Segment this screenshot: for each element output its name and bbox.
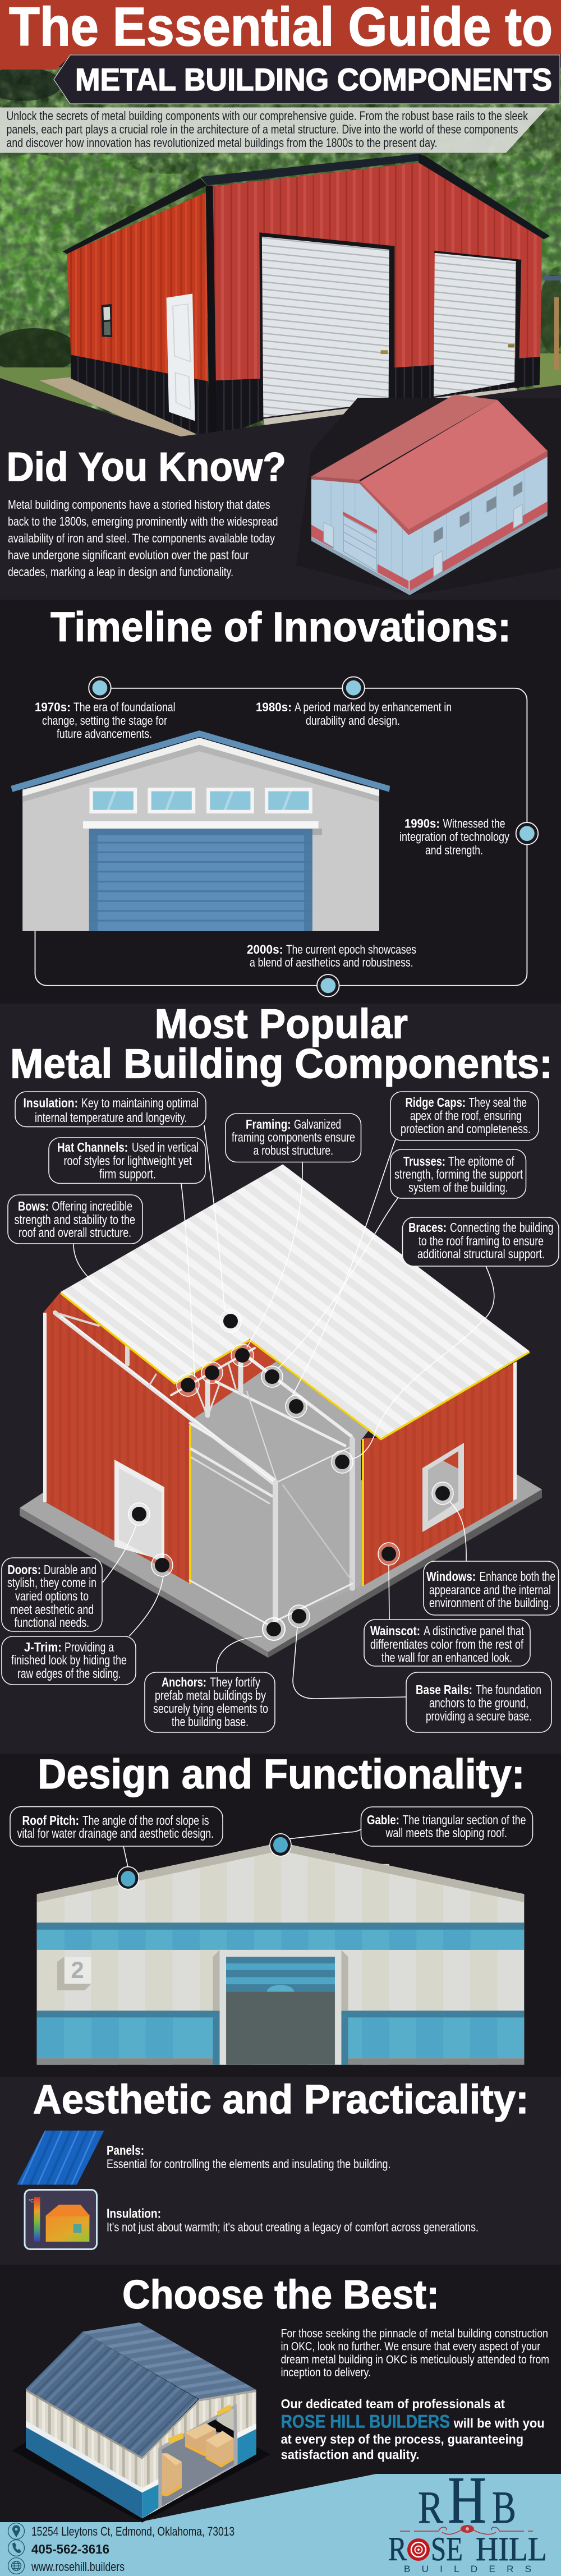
heading: Most Popular Metal Building Components — [10, 1001, 553, 1087]
right red wall — [363, 1361, 517, 1586]
callout: Trusses: Trusses: — [403, 1154, 445, 1169]
illustration: warehouse with pallets — [12, 2322, 270, 2523]
panel: choose the best — [0, 2265, 561, 2576]
callout: Doors: Durable and — [44, 1562, 96, 1577]
text: team statement: at every step of the process, guaranteeing — [281, 2432, 523, 2446]
building photo: red metal garage — [63, 154, 550, 440]
icon: blue metal panel — [17, 2131, 104, 2184]
callout: Bows — [8, 1195, 142, 1244]
timeline text: 2000s — [247, 942, 416, 969]
contact details — [8, 2523, 234, 2574]
callout: Trusses: The epitome of — [448, 1154, 514, 1169]
callout markers — [128, 1310, 453, 1640]
callout: Ridge Caps: apex of the roof, ensuring — [410, 1108, 522, 1123]
panel: aesthetic and practicality — [0, 2077, 561, 2265]
icon: thermal insulation house — [25, 2190, 96, 2250]
text: Insulation: Insulation: — [107, 2206, 161, 2221]
callout: Anchors: securely tying elements to — [153, 1701, 268, 1715]
callout: Ridge Caps: Ridge Caps: — [405, 1095, 466, 1110]
logo: Rose Hill Builders: B — [492, 2482, 516, 2533]
callout: Windows — [424, 1561, 559, 1615]
callout: Framing: Framing: — [246, 1117, 291, 1131]
heading: Most Popular Metal Building Components: Most Popular — [155, 1001, 408, 1047]
callout leader lines — [73, 1125, 494, 1699]
left red wall — [43, 1292, 195, 1584]
callout: Bows: strength and stability to the — [15, 1212, 135, 1227]
callout: Doors: functional needs. — [15, 1615, 89, 1630]
callout: Anchors: the building base. — [172, 1714, 249, 1729]
callout: Insulation: Insulation: — [24, 1096, 78, 1110]
text: address: 15254 Lleytons Ct, Edmond, Oklahoma, 73013 — [31, 2524, 234, 2538]
callout: J-Trim — [2, 1636, 136, 1685]
callout: Hat Channels: roof styles for lightweight yet — [64, 1153, 192, 1168]
callout: Wainscot: differentiates color from the rest of — [370, 1637, 523, 1652]
logo: Rose Hill Builders: BUILDERS — [404, 2564, 531, 2574]
panel: most popular components — [0, 1001, 561, 1754]
text: Insulation — [107, 2206, 479, 2234]
text: Panels — [107, 2143, 390, 2171]
callout: Hat Channels: firm support. — [99, 1167, 156, 1181]
history text: back to the 1800s, emerging prominently with the widespread — [8, 514, 278, 528]
leader: roof pitch — [123, 1846, 128, 1867]
callout: Doors: Doors: — [7, 1562, 41, 1577]
leader: gable — [290, 1829, 361, 1839]
text: team statement — [281, 2396, 545, 2462]
intro text — [7, 109, 528, 150]
timeline text: 1970s: The era of foundational — [73, 700, 175, 714]
timeline text: 2000s: The current epoch showcases — [286, 942, 416, 956]
callout: Hat Channels: Used in vertical — [132, 1140, 199, 1154]
callout: Bows: Offering incredible — [52, 1199, 132, 1213]
timeline text: 1980s — [256, 700, 452, 728]
callout: Framing: Galvanized — [294, 1117, 341, 1131]
logo: Rose Hill Builders: H — [448, 2463, 486, 2537]
text: phone: 405-562-3616 — [31, 2542, 109, 2556]
callout: Doors: varied options to — [15, 1589, 89, 1603]
text: team statement: will be with you — [453, 2416, 545, 2430]
callout: Anchors: Anchors: — [162, 1675, 206, 1690]
panel: did you know — [7, 394, 561, 595]
callout: J-Trim: J-Trim: — [24, 1640, 62, 1654]
timeline text: 1970s: 1970s: — [35, 700, 71, 714]
icon: globe — [8, 2558, 25, 2574]
illustration: gable warehouse front — [37, 1843, 524, 2065]
text: Panels: Essential for controlling the elements and insulating the building. — [107, 2157, 390, 2171]
text: team statement: Our dedicated team of professionals at — [281, 2396, 505, 2411]
timeline text: 1990s — [399, 817, 509, 857]
timeline text: 1970s — [35, 700, 175, 740]
callout: Framing: a robust structure. — [254, 1143, 333, 1158]
door on left wall — [114, 1460, 164, 1562]
heading: Aesthetic and Practicality: Aesthetic and Practicality: — [33, 2077, 529, 2122]
callout: Framing: framing components ensure — [232, 1130, 355, 1144]
building number sign: 2 — [71, 1957, 84, 1983]
callout: Hat Channels: Hat Channels: — [57, 1140, 128, 1154]
callout: Gable: Gable: — [367, 1813, 399, 1827]
timeline text: 1980s: 1980s: — [256, 700, 292, 714]
heading: Design and Functionality: Design and Functionality: — [38, 1751, 525, 1797]
callout: Gable: wall meets the sloping roof. — [385, 1825, 507, 1840]
timeline text: 1980s: A period marked by enhancement in — [295, 700, 452, 714]
section background — [0, 1004, 561, 1754]
dark wedge below photo — [0, 378, 561, 600]
callout: Trusses: strength, forming the support — [394, 1167, 523, 1181]
footer band — [0, 2474, 561, 2576]
callout: Anchors: prefab metal buildings by — [155, 1688, 266, 1703]
text: Insulation: It's not just about warmth; it's about creating a legacy of comfort across generations. — [107, 2220, 479, 2234]
callout: Gable: The triangular section of the — [403, 1813, 526, 1827]
logo: Rose Hill Builders: R — [388, 2531, 407, 2568]
callout: Insulation: internal temperature and longevity. — [35, 1110, 187, 1125]
callout: Roof Pitch: vital for water drainage and aesthetic design. — [17, 1826, 214, 1841]
steel framing and trusses — [55, 1312, 352, 1625]
yellow roof edges — [61, 1293, 530, 1439]
logo: Rose Hill Builders — [388, 2463, 547, 2574]
callout: Windows: Windows: — [426, 1569, 476, 1584]
callout: Base Rails: Base Rails: — [416, 1682, 472, 1697]
history text: have undergone significant evolution over the past four — [8, 548, 249, 562]
timeline text: 1970s: future advancements. — [57, 727, 152, 740]
text: team statement: ROSE HILL BUILDERS — [281, 2411, 450, 2431]
callout: J-Trim: finished look by hiding the — [11, 1653, 127, 1667]
callout: Wainscot: A distinctive panel that — [424, 1623, 524, 1638]
callout: Bows: Bows: — [18, 1199, 49, 1213]
icon: thermal insulation house: °C — [29, 2198, 34, 2204]
callout: Braces — [403, 1217, 559, 1266]
timeline text: 1970s: change, setting the stage for — [42, 714, 167, 728]
icon: phone — [8, 2540, 25, 2556]
heading: Did You Know?: Did You Know? — [7, 445, 286, 490]
panel: design and functionality — [0, 1751, 561, 2077]
icon: location pin — [8, 2523, 25, 2539]
timeline text: 1990s: integration of technology — [399, 830, 509, 844]
marker: gable — [270, 1834, 291, 1856]
callout: Insulation: Key to maintaining optimal — [81, 1096, 199, 1110]
callout: Base Rails: anchors to the ground, — [429, 1696, 528, 1710]
interior walls and floor — [190, 1361, 369, 1625]
yellow trims — [189, 1425, 364, 1586]
logo flourish — [400, 2527, 533, 2534]
callout: J-Trim: Providing a — [65, 1640, 114, 1654]
corrugated roof — [61, 1165, 530, 1438]
callout: Base Rails: The foundation — [476, 1682, 541, 1697]
text: invitation — [281, 2326, 549, 2379]
heading: Choose the Best: Choose the Best: — [122, 2273, 439, 2317]
callout: Wainscot: the wall for an enhanced look. — [381, 1650, 512, 1664]
callout: Trusses — [390, 1149, 526, 1198]
timeline text: 1990s: Witnessed the — [443, 817, 505, 830]
callout: Hat Channels — [49, 1138, 205, 1184]
callout: Gable — [361, 1807, 533, 1846]
callout: J-Trim: raw edges of the siding. — [17, 1666, 121, 1681]
callout: Bows: roof and overall structure. — [19, 1225, 131, 1240]
callout: Doors — [2, 1558, 102, 1631]
callout: Ridge Caps — [390, 1092, 539, 1140]
subtitle: Metal Building Components: METAL BUILDING COMPONENTS — [75, 62, 552, 97]
illustration: isometric red-roof building — [296, 394, 561, 595]
callout: Anchors — [145, 1672, 275, 1732]
timeline background — [0, 600, 561, 1004]
callout: Wainscot — [364, 1620, 530, 1666]
back gable wall — [175, 1340, 276, 1418]
callout: Framing — [226, 1114, 361, 1162]
logo rose in wordmark — [407, 2538, 430, 2561]
concrete slab — [20, 1474, 542, 1658]
window on right wall — [422, 1443, 464, 1532]
text: invitation: inception to delivery. — [281, 2366, 371, 2379]
callout: Roof Pitch: Roof Pitch: — [22, 1813, 79, 1828]
callout: Wainscot: Wainscot: — [370, 1623, 420, 1638]
timeline text: 1980s: durability and design. — [306, 714, 400, 728]
heading: Most Popular Metal Building Components: Metal Building Components: — [10, 1040, 553, 1087]
panel: hero header with building photo — [0, 0, 561, 600]
callout: Anchors: They fortify — [210, 1675, 260, 1690]
timeline text: 1990s: 1990s: — [404, 817, 440, 830]
callout: Braces: Braces: — [408, 1220, 447, 1235]
history text: availability of iron and steel. The components available today — [8, 531, 275, 545]
text: website: www.rosehill.builders — [31, 2560, 125, 2574]
section background — [0, 2077, 561, 2265]
callout: Insulation — [15, 1092, 206, 1127]
logo: Rose Hill Builders: HILL — [476, 2531, 547, 2568]
history text — [8, 498, 278, 579]
title ribbon — [0, 0, 561, 70]
callout: Roof Pitch: The angle of the roof slope is — [82, 1813, 209, 1828]
text: Panels: Panels: — [107, 2143, 144, 2158]
timeline text: 2000s: a blend of aesthetics and robustness. — [250, 955, 413, 969]
history text: Metal building components have a storied history that dates — [8, 498, 270, 512]
timeline text: 1990s: and strength. — [425, 843, 483, 857]
logo small rose — [461, 2525, 474, 2533]
heading: Timeline of Innovations: Timeline of Innovations: — [50, 604, 511, 650]
ground: grass and gravel — [0, 276, 561, 443]
photo background: trees — [0, 67, 561, 449]
logo: Rose Hill Builders: R — [418, 2482, 443, 2533]
callout: Doors: stylish, they come in — [7, 1575, 96, 1590]
callout: Base Rails — [406, 1672, 551, 1732]
callout: Doors: meet aesthetic and — [10, 1602, 94, 1617]
text: team statement: satisfaction and quality. — [281, 2448, 419, 2462]
section background — [0, 2265, 561, 2576]
illustration: cutaway isometric building — [20, 1165, 542, 1658]
callout: Ridge Caps: They seal the — [469, 1095, 527, 1110]
timeline path and nodes — [35, 677, 538, 997]
marker: roof pitch — [117, 1867, 139, 1889]
section background — [0, 1754, 561, 2077]
intro text: and discover how innovation has revolutionized metal buildings from the 1800s to the present day. — [7, 136, 438, 150]
timeline text: 2000s: 2000s: — [247, 942, 283, 956]
panel: timeline of innovations — [0, 600, 561, 1004]
subtitle banner — [54, 55, 560, 104]
illustration: warehouse with blue door — [11, 730, 390, 931]
history text: decades, marking a leap in design and functionality. — [8, 565, 233, 579]
logo: Rose Hill Builders: SE — [431, 2531, 463, 2568]
callout: Roof Pitch — [10, 1807, 223, 1846]
callout: Trusses: system of the building. — [408, 1180, 508, 1195]
intro band — [0, 108, 548, 153]
